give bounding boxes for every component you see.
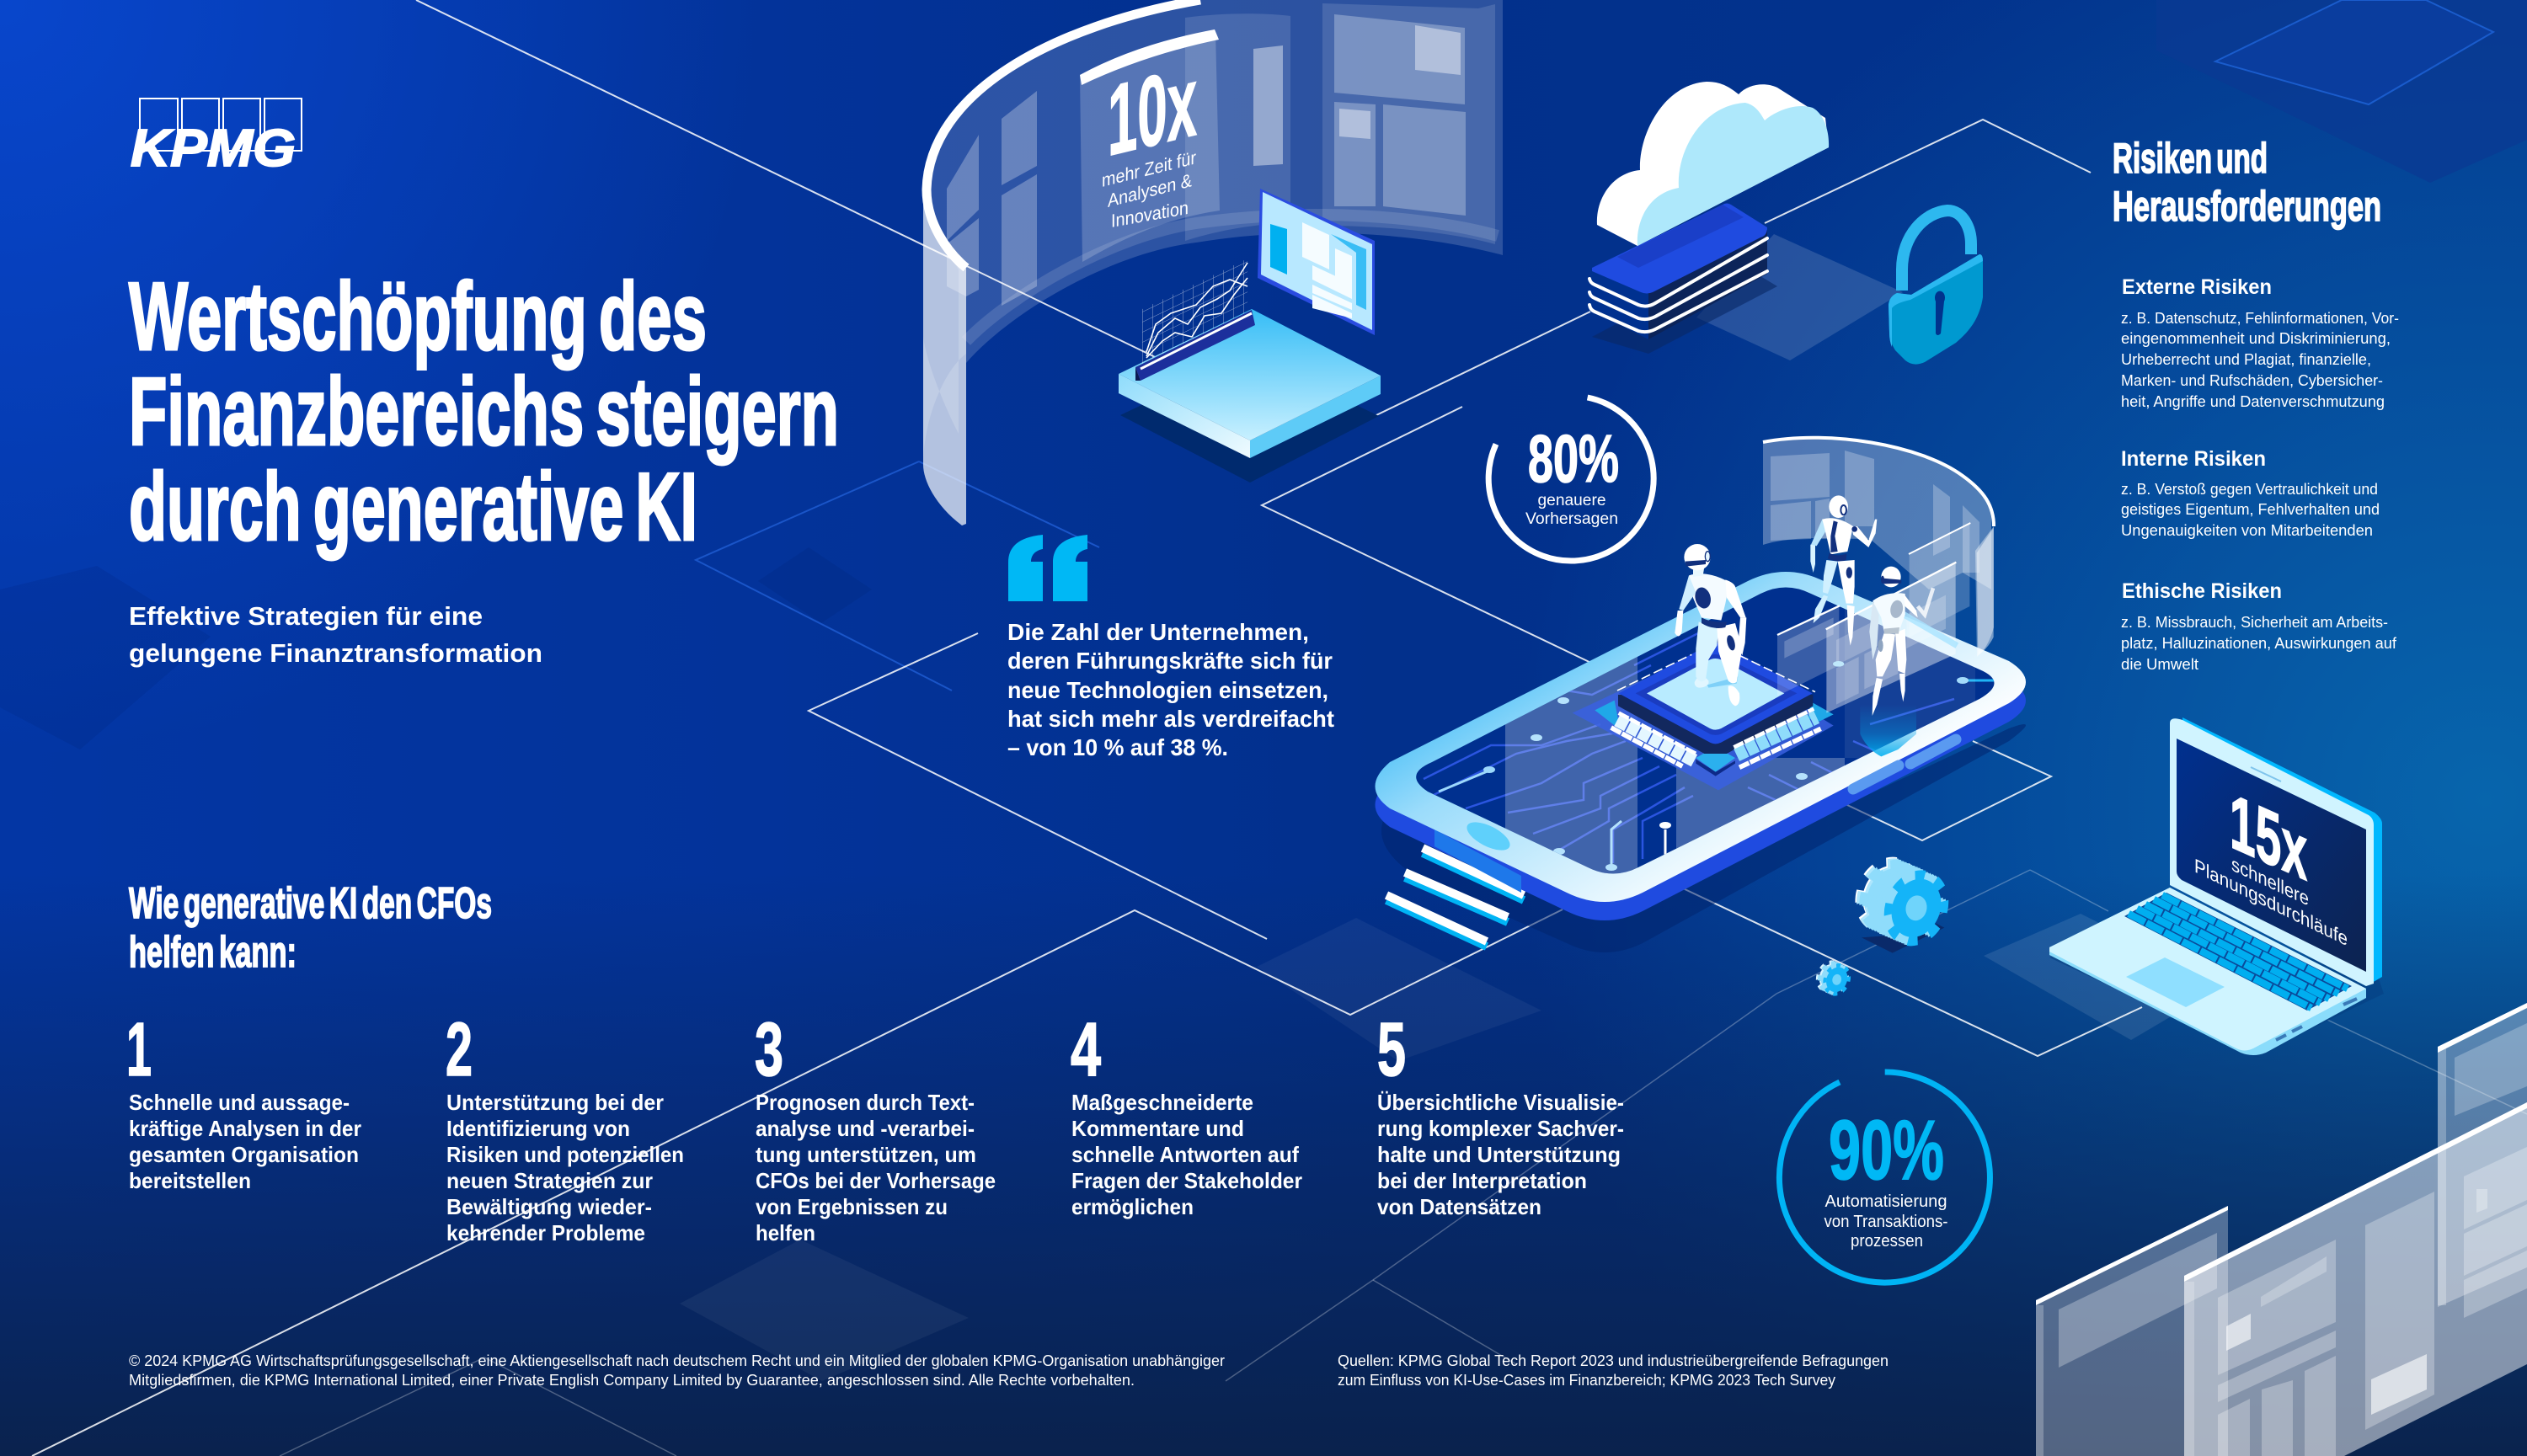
illustration: laptop with 15x stat xyxy=(2049,717,2384,1058)
10x panel: Innovation xyxy=(1111,197,1189,232)
stat: 90 percent: prozessen xyxy=(1851,1232,1923,1251)
item 5 xyxy=(1377,1008,1624,1219)
base xyxy=(2049,888,2366,1055)
title xyxy=(129,264,839,561)
lid xyxy=(2182,717,2382,986)
footer sources: zum Einfluss von KI-Use-Cases im Finanzbereich; KPMG 2023 Tech Survey xyxy=(1338,1372,1835,1389)
section heading: how generative AI helps CFOs: helfen kann: xyxy=(129,928,297,977)
quote text: hat sich mehr als verdreifacht xyxy=(1007,706,1334,732)
internal risks: Ungenauigkeiten von Mitarbeitenden xyxy=(2121,521,2373,539)
quote text: Die Zahl der Unternehmen, xyxy=(1007,619,1309,645)
illustration: smartphone with chip and robots xyxy=(1375,437,2026,952)
quote block xyxy=(1007,535,1334,760)
item 2: Bewältigung wieder- xyxy=(446,1194,652,1219)
footer sources xyxy=(1338,1352,1889,1389)
item 3: Prognosen durch Text- xyxy=(756,1090,975,1115)
footer sources: Quellen: KPMG Global Tech Report 2023 und industrieübergreifende Befragungen xyxy=(1338,1352,1889,1369)
panel: risks and challenges xyxy=(2113,135,2399,673)
item 5: von Datensätzen xyxy=(1377,1194,1541,1219)
footer copyright: Mitgliedsfirmen, die KPMG International Limited, einer Private English Company Limited by Guarantee, angeschlossen sind. Alle Rechte vorbehalten. xyxy=(129,1372,1135,1389)
item 4 xyxy=(1071,1008,1302,1219)
side buttons xyxy=(1853,739,1956,789)
tablet xyxy=(1258,189,1375,335)
left panel xyxy=(2036,1206,2228,1456)
stat: 90 percent: 90% xyxy=(1829,1103,1944,1197)
stat: 80 percent: Vorhersagen xyxy=(1525,510,1618,528)
item 4: 4 xyxy=(1071,1008,1101,1092)
illustration: curved glass screen with 10x stat xyxy=(923,0,1503,525)
KPMG logo: KPMG xyxy=(131,120,296,178)
item 1: bereitstellen xyxy=(129,1168,251,1193)
item 1: 1 xyxy=(126,1008,152,1092)
10x panel xyxy=(1080,29,1220,262)
ethical risks xyxy=(2121,579,2397,673)
internal risks: Interne Risiken xyxy=(2121,447,2266,471)
phone shadow xyxy=(1381,724,2026,952)
ethical risks: z. B. Missbrauch, Sicherheit am Arbeits- xyxy=(2121,613,2388,631)
icon: padlock xyxy=(1889,211,1983,365)
menu bars xyxy=(1386,848,1524,947)
10x panel: Analysen & xyxy=(1108,169,1192,211)
icon: quotation marks xyxy=(1008,535,1087,601)
footer copyright xyxy=(129,1352,1225,1389)
phone body xyxy=(1375,572,2026,902)
robot: on chip xyxy=(1675,544,1746,706)
item 3: von Ergebnissen zu xyxy=(756,1194,948,1219)
phone screen xyxy=(1416,588,1995,874)
external risks xyxy=(2121,275,2399,410)
item 1: kräftige Analysen in der xyxy=(129,1116,361,1141)
item 4: Fragen der Stakeholder xyxy=(1071,1168,1302,1193)
heading xyxy=(2113,135,2381,230)
touchpad xyxy=(2126,957,2225,1007)
laptop screen text xyxy=(2194,777,2348,951)
chart xyxy=(1135,259,1255,381)
item 3: CFOs bei der Vorhersage xyxy=(756,1168,996,1193)
subtitle xyxy=(129,601,542,668)
robot: back xyxy=(1810,495,1877,646)
internal risks: geistiges Eigentum, Fehlverhalten und xyxy=(2121,500,2380,518)
item 1: gesamten Organisation xyxy=(129,1142,359,1167)
external risks: Externe Risiken xyxy=(2122,275,2272,299)
stat: 80 percent: 80% xyxy=(1528,421,1619,496)
item 2: 2 xyxy=(446,1008,473,1092)
item 1 xyxy=(126,1008,361,1193)
keyboard xyxy=(2124,893,2352,1011)
item 3 xyxy=(755,1008,996,1245)
footer copyright: © 2024 KPMG AG Wirtschaftsprüfungsgesellschaft, eine Aktiengesellschaft nach deutschem Recht und ein Mitglied der globalen KPMG-Organisation unabhängiger xyxy=(129,1352,1225,1369)
item 2: Identifizierung von xyxy=(446,1116,630,1141)
external risks: heit, Angriffe und Datenverschmutzung xyxy=(2121,392,2385,410)
chip pins xyxy=(1611,709,1821,767)
section heading: how generative AI helps CFOs: Wie generative KI den CFOs xyxy=(129,879,492,928)
item 2: Unterstützung bei der xyxy=(446,1090,664,1115)
item 5: 5 xyxy=(1377,1008,1406,1092)
chip xyxy=(1573,643,1834,790)
item 2: neuen Strategien zur xyxy=(446,1168,653,1193)
cloud xyxy=(1597,82,1829,246)
item 3: tung unterstützen, um xyxy=(756,1142,976,1167)
laptop screen text: 15x xyxy=(2230,777,2307,898)
quote text xyxy=(1007,619,1334,760)
glow below robot xyxy=(1860,705,1916,756)
illustration: bottom right glass panels xyxy=(2036,1003,2527,1456)
item 4: schnelle Antworten auf xyxy=(1071,1142,1299,1167)
title: durch generative KI xyxy=(129,454,697,561)
item 4: Kommentare und xyxy=(1071,1116,1244,1141)
heading: Risiken und xyxy=(2113,135,2268,182)
item 2: Risiken und potenziellen xyxy=(446,1142,684,1167)
ethical risks: Ethische Risiken xyxy=(2122,579,2282,603)
illustration: cloud on server xyxy=(1589,82,1903,360)
back glass panel xyxy=(1763,437,1994,657)
robots and front panels xyxy=(1675,495,1994,756)
stat: 90 percent: von Transaktions- xyxy=(1824,1213,1947,1231)
item 5: halte und Unterstützung xyxy=(1377,1142,1621,1167)
subtitle: Effektive Strategien für eine xyxy=(129,601,483,631)
item 3: 3 xyxy=(755,1008,783,1092)
KPMG logo xyxy=(131,99,302,178)
subtitle: gelungene Finanztransformation xyxy=(129,638,542,668)
stat: 80 percent xyxy=(1488,397,1654,561)
item 5: bei der Interpretation xyxy=(1377,1168,1587,1193)
stat: 80 percent: genauere xyxy=(1538,492,1605,509)
quote text: – von 10 % auf 38 %. xyxy=(1007,734,1228,760)
item 2 xyxy=(446,1008,684,1245)
external risks: z. B. Datenschutz, Fehlinformationen, Vor- xyxy=(2121,309,2399,327)
rear right panel xyxy=(2438,1003,2527,1307)
external risks: eingenommenheit und Diskriminierung, xyxy=(2121,329,2391,347)
stat: 90 percent: Automatisierung xyxy=(1824,1192,1947,1211)
item 4: ermöglichen xyxy=(1071,1194,1194,1219)
item 3: helfen xyxy=(756,1220,815,1245)
title: Wertschöpfung des xyxy=(129,264,707,371)
stat: 90 percent xyxy=(1779,1072,1990,1283)
section heading: how generative AI helps CFOs xyxy=(129,879,492,977)
laptop screen text: Planungsdurchläufe xyxy=(2194,855,2348,951)
title: Finanzbereichs steigern xyxy=(129,359,839,466)
ethical risks: platz, Halluzinationen, Auswirkungen auf xyxy=(2121,634,2397,652)
laptop screen text: schnellere xyxy=(2231,853,2309,911)
internal risks xyxy=(2121,447,2380,539)
item 2: kehrender Probleme xyxy=(446,1220,645,1245)
server stack xyxy=(1589,204,1777,354)
robot: side xyxy=(1869,567,1918,716)
front panel xyxy=(2184,1102,2527,1456)
item 1: Schnelle und aussage- xyxy=(129,1090,350,1115)
illustration: platform with chart and tablet xyxy=(1119,189,1381,483)
ethical risks: die Umwelt xyxy=(2121,655,2198,673)
icon: small gear xyxy=(1817,960,1850,997)
quote text: deren Führungskräfte sich für xyxy=(1007,648,1333,674)
quote text: neue Technologien einsetzen, xyxy=(1007,677,1328,703)
icon: large gear xyxy=(1857,856,1946,953)
front glass panels xyxy=(1777,523,1994,713)
home button xyxy=(1463,817,1514,856)
item 4: Maßgeschneiderte xyxy=(1071,1090,1253,1115)
phone side xyxy=(1375,590,2026,920)
external risks: Urheberrecht und Plagiat, finanzielle, xyxy=(2121,350,2371,368)
internal risks: z. B. Verstoß gegen Vertraulichkeit und xyxy=(2121,480,2378,498)
circuit board xyxy=(1424,606,2001,876)
item 5: rung komplexer Sachver- xyxy=(1377,1116,1624,1141)
item 5: Übersichtliche Visualisie- xyxy=(1377,1090,1624,1115)
10x panel: 10x xyxy=(1108,45,1197,178)
heading: Herausforderungen xyxy=(2113,183,2381,230)
10x panel: mehr Zeit für xyxy=(1102,147,1196,191)
external risks: Marken- und Rufschäden, Cybersicher- xyxy=(2121,371,2383,389)
home strip xyxy=(1434,829,1521,893)
item 3: analyse und -verarbei- xyxy=(756,1116,975,1141)
